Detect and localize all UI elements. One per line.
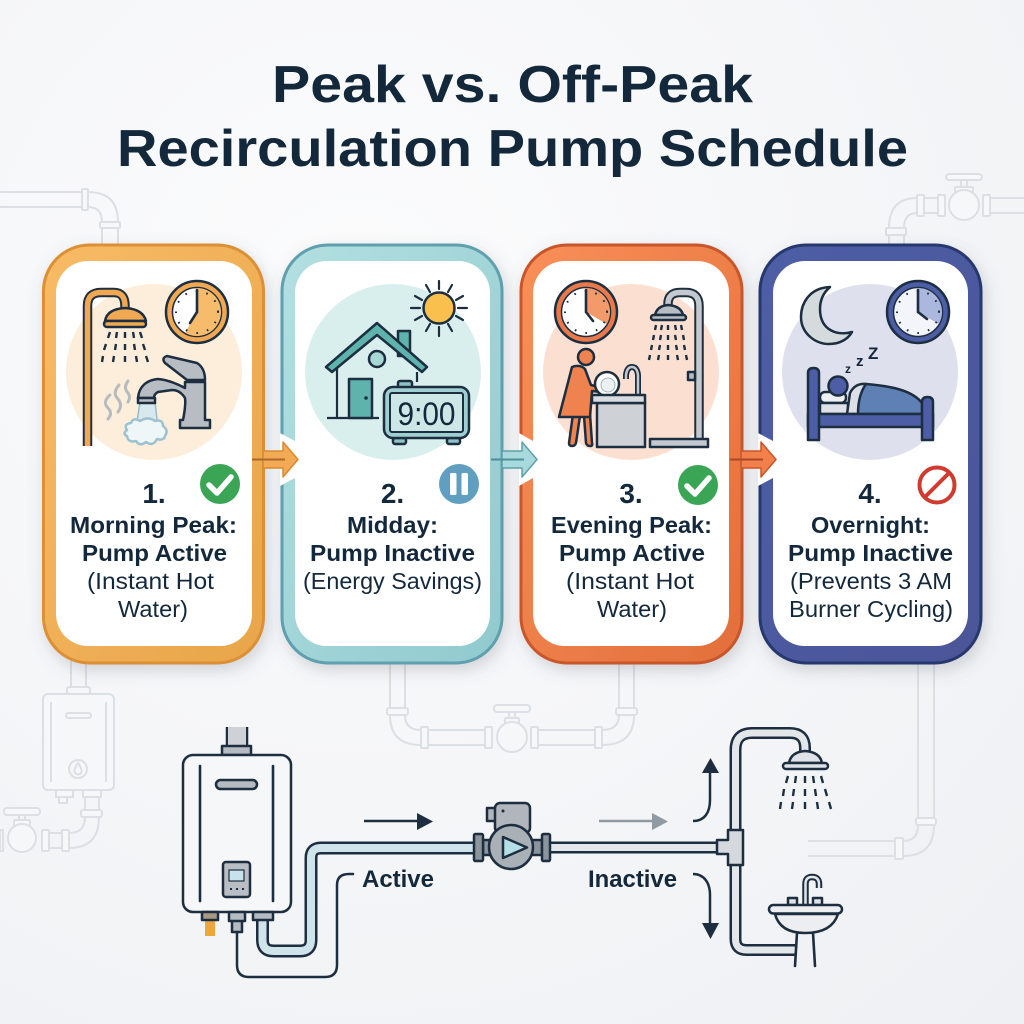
arrow: midday to evening (491, 433, 542, 486)
icon: sleeping z letters: z (856, 353, 864, 370)
faint background water heater with valve (0, 660, 114, 852)
title (117, 56, 908, 178)
icon: sleeping z letters: z (845, 362, 851, 376)
diagram: recirculation system (183, 727, 842, 977)
text: midday: (Energy Savings) (303, 568, 482, 594)
text: overnight: Pump Inactive (788, 540, 953, 566)
icon: evening clock at four (555, 281, 617, 343)
text: morning peak (70, 478, 237, 622)
text: morning peak: 1. (142, 478, 166, 509)
thin return line (237, 874, 353, 977)
icon: sleeping z letters: Z (868, 344, 878, 363)
panel: evening peak (521, 245, 742, 663)
arrow: morning to midday (252, 433, 303, 486)
text: midday (303, 478, 482, 594)
icon: digital clock showing 9:00: 9:00 (398, 396, 456, 432)
faint background pipes: centre with valve (387, 660, 637, 752)
icon: sink (769, 877, 842, 966)
text: morning peak: Morning Peak: (70, 512, 237, 538)
arrow: inactive flow (599, 813, 668, 830)
title: Recirculation Pump Schedule (117, 120, 908, 178)
arrow: active flow (364, 813, 433, 830)
arrow: up to shower (693, 758, 719, 821)
icon: orange shower (88, 292, 148, 446)
text: morning peak: (Instant Hot (87, 568, 215, 594)
icon: person sleeping in bed (808, 368, 933, 440)
text: midday: 2. (381, 478, 404, 509)
text: midday: Midday: (347, 512, 438, 538)
text: overnight: Burner Cycling) (789, 596, 953, 622)
text: overnight: Overnight: (811, 512, 930, 538)
icon: faucet with steam (105, 356, 210, 444)
text: overnight: 4. (858, 478, 882, 509)
text: evening peak: Pump Active (559, 540, 705, 566)
icon: morning clock at seven (166, 281, 228, 343)
text: midday: Pump Inactive (310, 540, 475, 566)
inactive pipe to fixtures (548, 733, 805, 950)
title: Peak vs. Off-Peak (272, 56, 753, 114)
text: evening peak: 3. (619, 478, 643, 509)
icon: crescent moon (801, 287, 852, 344)
active hot water pipe (253, 848, 476, 951)
label: active: Active (362, 866, 434, 893)
text: morning peak: Pump Active (82, 540, 227, 566)
panel: midday (282, 245, 502, 663)
faint background pipes: top right with valve (886, 174, 1024, 244)
icon: house (326, 323, 427, 418)
text: evening peak: Water) (597, 596, 667, 622)
faint background pipes: right elbow (808, 660, 936, 859)
icon: sun (411, 281, 467, 336)
text: evening peak: (Instant Hot (566, 568, 695, 594)
text: evening peak: Evening Peak: (551, 512, 712, 538)
label: inactive: Inactive (588, 866, 677, 893)
icon: grey shower (649, 292, 708, 447)
icon: pause badge (439, 464, 479, 504)
icon: no-entry badge (920, 468, 954, 502)
icon: green check badge (200, 464, 240, 504)
faint background pipes: top left (0, 189, 120, 244)
icon: digital clock showing 9:00 (384, 381, 469, 444)
text: morning peak: Water) (118, 596, 188, 622)
text: evening peak (551, 478, 712, 622)
panel: morning peak (44, 245, 264, 663)
text: overnight (788, 478, 953, 622)
water heater (183, 727, 291, 936)
icon: sleeping z letters (845, 344, 878, 376)
icon: night clock at four (887, 281, 949, 343)
icon: shower head (780, 751, 831, 809)
arrow: down to sink (693, 874, 719, 939)
icon: green check badge (678, 465, 718, 505)
icon: person washing dishes at sink (559, 349, 645, 447)
arrow: evening to overnight (730, 433, 781, 486)
text: overnight: (Prevents 3 AM (790, 568, 952, 594)
panel: overnight (760, 245, 981, 663)
circulation pump (474, 803, 550, 869)
